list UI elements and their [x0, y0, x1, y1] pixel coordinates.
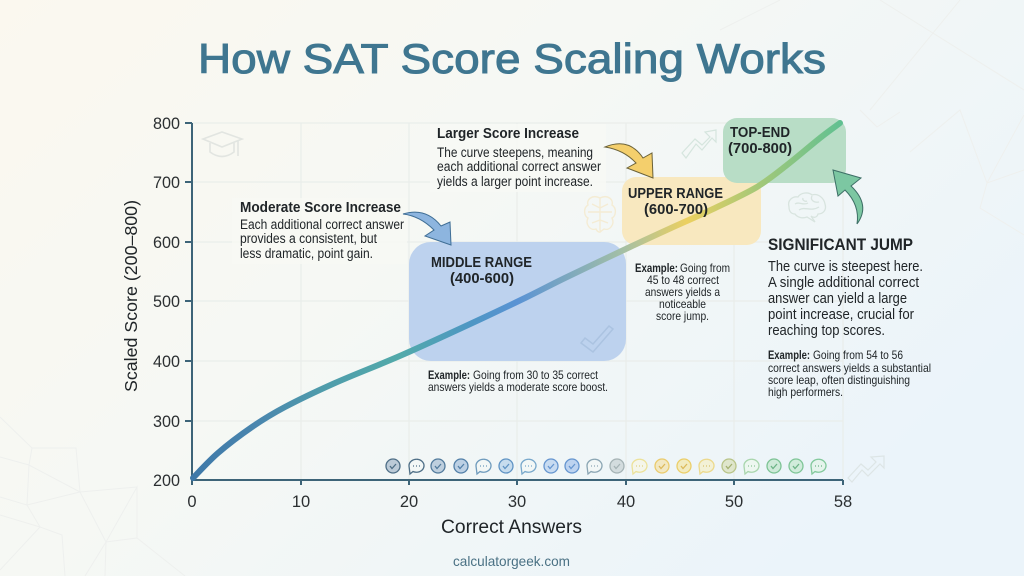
x axis labels: 20 [400, 493, 418, 511]
label: top-end: (700-800) [728, 141, 792, 157]
label: upper range: UPPER RANGE [628, 186, 723, 202]
example: upper range: score jump. [656, 309, 709, 323]
label: top-end [728, 125, 792, 157]
label: upper range [628, 186, 723, 218]
callout: significant jump: Going from 54 to 56 [813, 348, 903, 362]
label: middle range: MIDDLE RANGE [431, 255, 532, 271]
example: upper range: noticeable [659, 297, 706, 311]
callout: larger score increase: each additional correct answer [437, 159, 601, 174]
example: middle range [428, 368, 608, 394]
example: upper range [635, 261, 730, 323]
y axis labels: 300 [153, 413, 180, 431]
x axis labels: 0 [187, 493, 197, 511]
x axis labels: 30 [508, 493, 526, 511]
example: upper range: 45 to 48 correct [647, 273, 720, 287]
band: upper range [622, 177, 761, 245]
arrow: green [833, 170, 863, 224]
chart: score scaling curve [185, 118, 846, 485]
callout: significant jump [768, 235, 931, 399]
y axis labels: 800 [153, 115, 180, 133]
label: upper range: (600-700) [644, 202, 708, 218]
callout: significant jump: reaching top scores. [768, 322, 885, 339]
arrow: yellow [605, 144, 653, 178]
example: middle range: Going from 30 to 35 correct [473, 368, 599, 382]
callout: significant jump: A single additional correct [768, 274, 920, 291]
icon row: checks and chat bubbles [386, 459, 826, 474]
y axis labels: 500 [153, 293, 180, 311]
x axis labels: 58 [834, 493, 852, 511]
icon: graduation cap [203, 132, 242, 156]
label: middle range: (400-600) [450, 271, 514, 287]
label: middle range [431, 255, 532, 287]
band: middle range [409, 242, 626, 361]
example: upper range: Going from [680, 261, 730, 275]
text halo: larger [430, 124, 606, 192]
example: upper range: answers yields a [645, 285, 720, 299]
callout: significant jump: The curve is steepest here. [768, 258, 923, 275]
callout: significant jump: Example: [768, 348, 810, 362]
y axis labels: 700 [153, 174, 180, 192]
callout: moderate score increase: Moderate Score Increase [240, 200, 401, 216]
callout: significant jump: point increase, crucial for [768, 306, 914, 323]
x axis labels: 10 [292, 493, 310, 511]
example: middle range: answers yields a moderate score boost. [428, 380, 608, 394]
callout: significant jump: correct answers yields a substantial [768, 361, 931, 375]
callout: significant jump: high performers. [768, 385, 843, 399]
x axis labels [187, 493, 852, 511]
x axis title: Correct Answers [441, 517, 582, 538]
y axis labels: 400 [153, 353, 180, 371]
icon: brain green [789, 193, 826, 222]
y axis labels: 200 [153, 472, 180, 490]
callout: larger score increase: The curve steepens, meaning [437, 145, 593, 160]
callout: moderate score increase [240, 200, 404, 261]
y axis labels: 600 [153, 234, 180, 252]
title: How SAT Score Scaling Works [198, 35, 826, 82]
curve [193, 123, 840, 478]
y axis title: Scaled Score (200–800) [121, 200, 141, 392]
arrow: blue [403, 212, 451, 245]
text halo: moderate [232, 198, 407, 264]
y axis labels [153, 115, 180, 490]
icon: trend arrow bottom [848, 456, 884, 482]
callout: moderate score increase: provides a consistent, but [240, 231, 377, 246]
example: middle range: Example: [428, 368, 470, 382]
callout: moderate score increase: Each additional correct answer [240, 217, 404, 232]
callout: moderate score increase: less dramatic, point gain. [240, 246, 373, 261]
label: top-end: TOP-END [730, 125, 790, 141]
callout: larger score increase: Larger Score Increase [437, 126, 579, 142]
icon: check mark in band [581, 326, 613, 352]
band: top-end [723, 118, 846, 183]
x axis [192, 480, 843, 485]
example: upper range: Example: [635, 261, 678, 275]
x axis labels: 40 [617, 493, 635, 511]
y axis [185, 123, 192, 480]
callout: significant jump: score leap, often distinguishing [768, 373, 910, 387]
source: calculatorgeek.com [453, 553, 570, 569]
callout: larger score increase [437, 126, 601, 189]
x axis labels: 50 [725, 493, 743, 511]
callout: larger score increase: yields a larger point increase. [437, 174, 593, 189]
icon: brain yellow [585, 197, 615, 232]
callout: significant jump: SIGNIFICANT JUMP [768, 235, 913, 254]
icon: trend arrow top [682, 130, 716, 158]
callout: significant jump: answer can yield a large [768, 290, 907, 307]
